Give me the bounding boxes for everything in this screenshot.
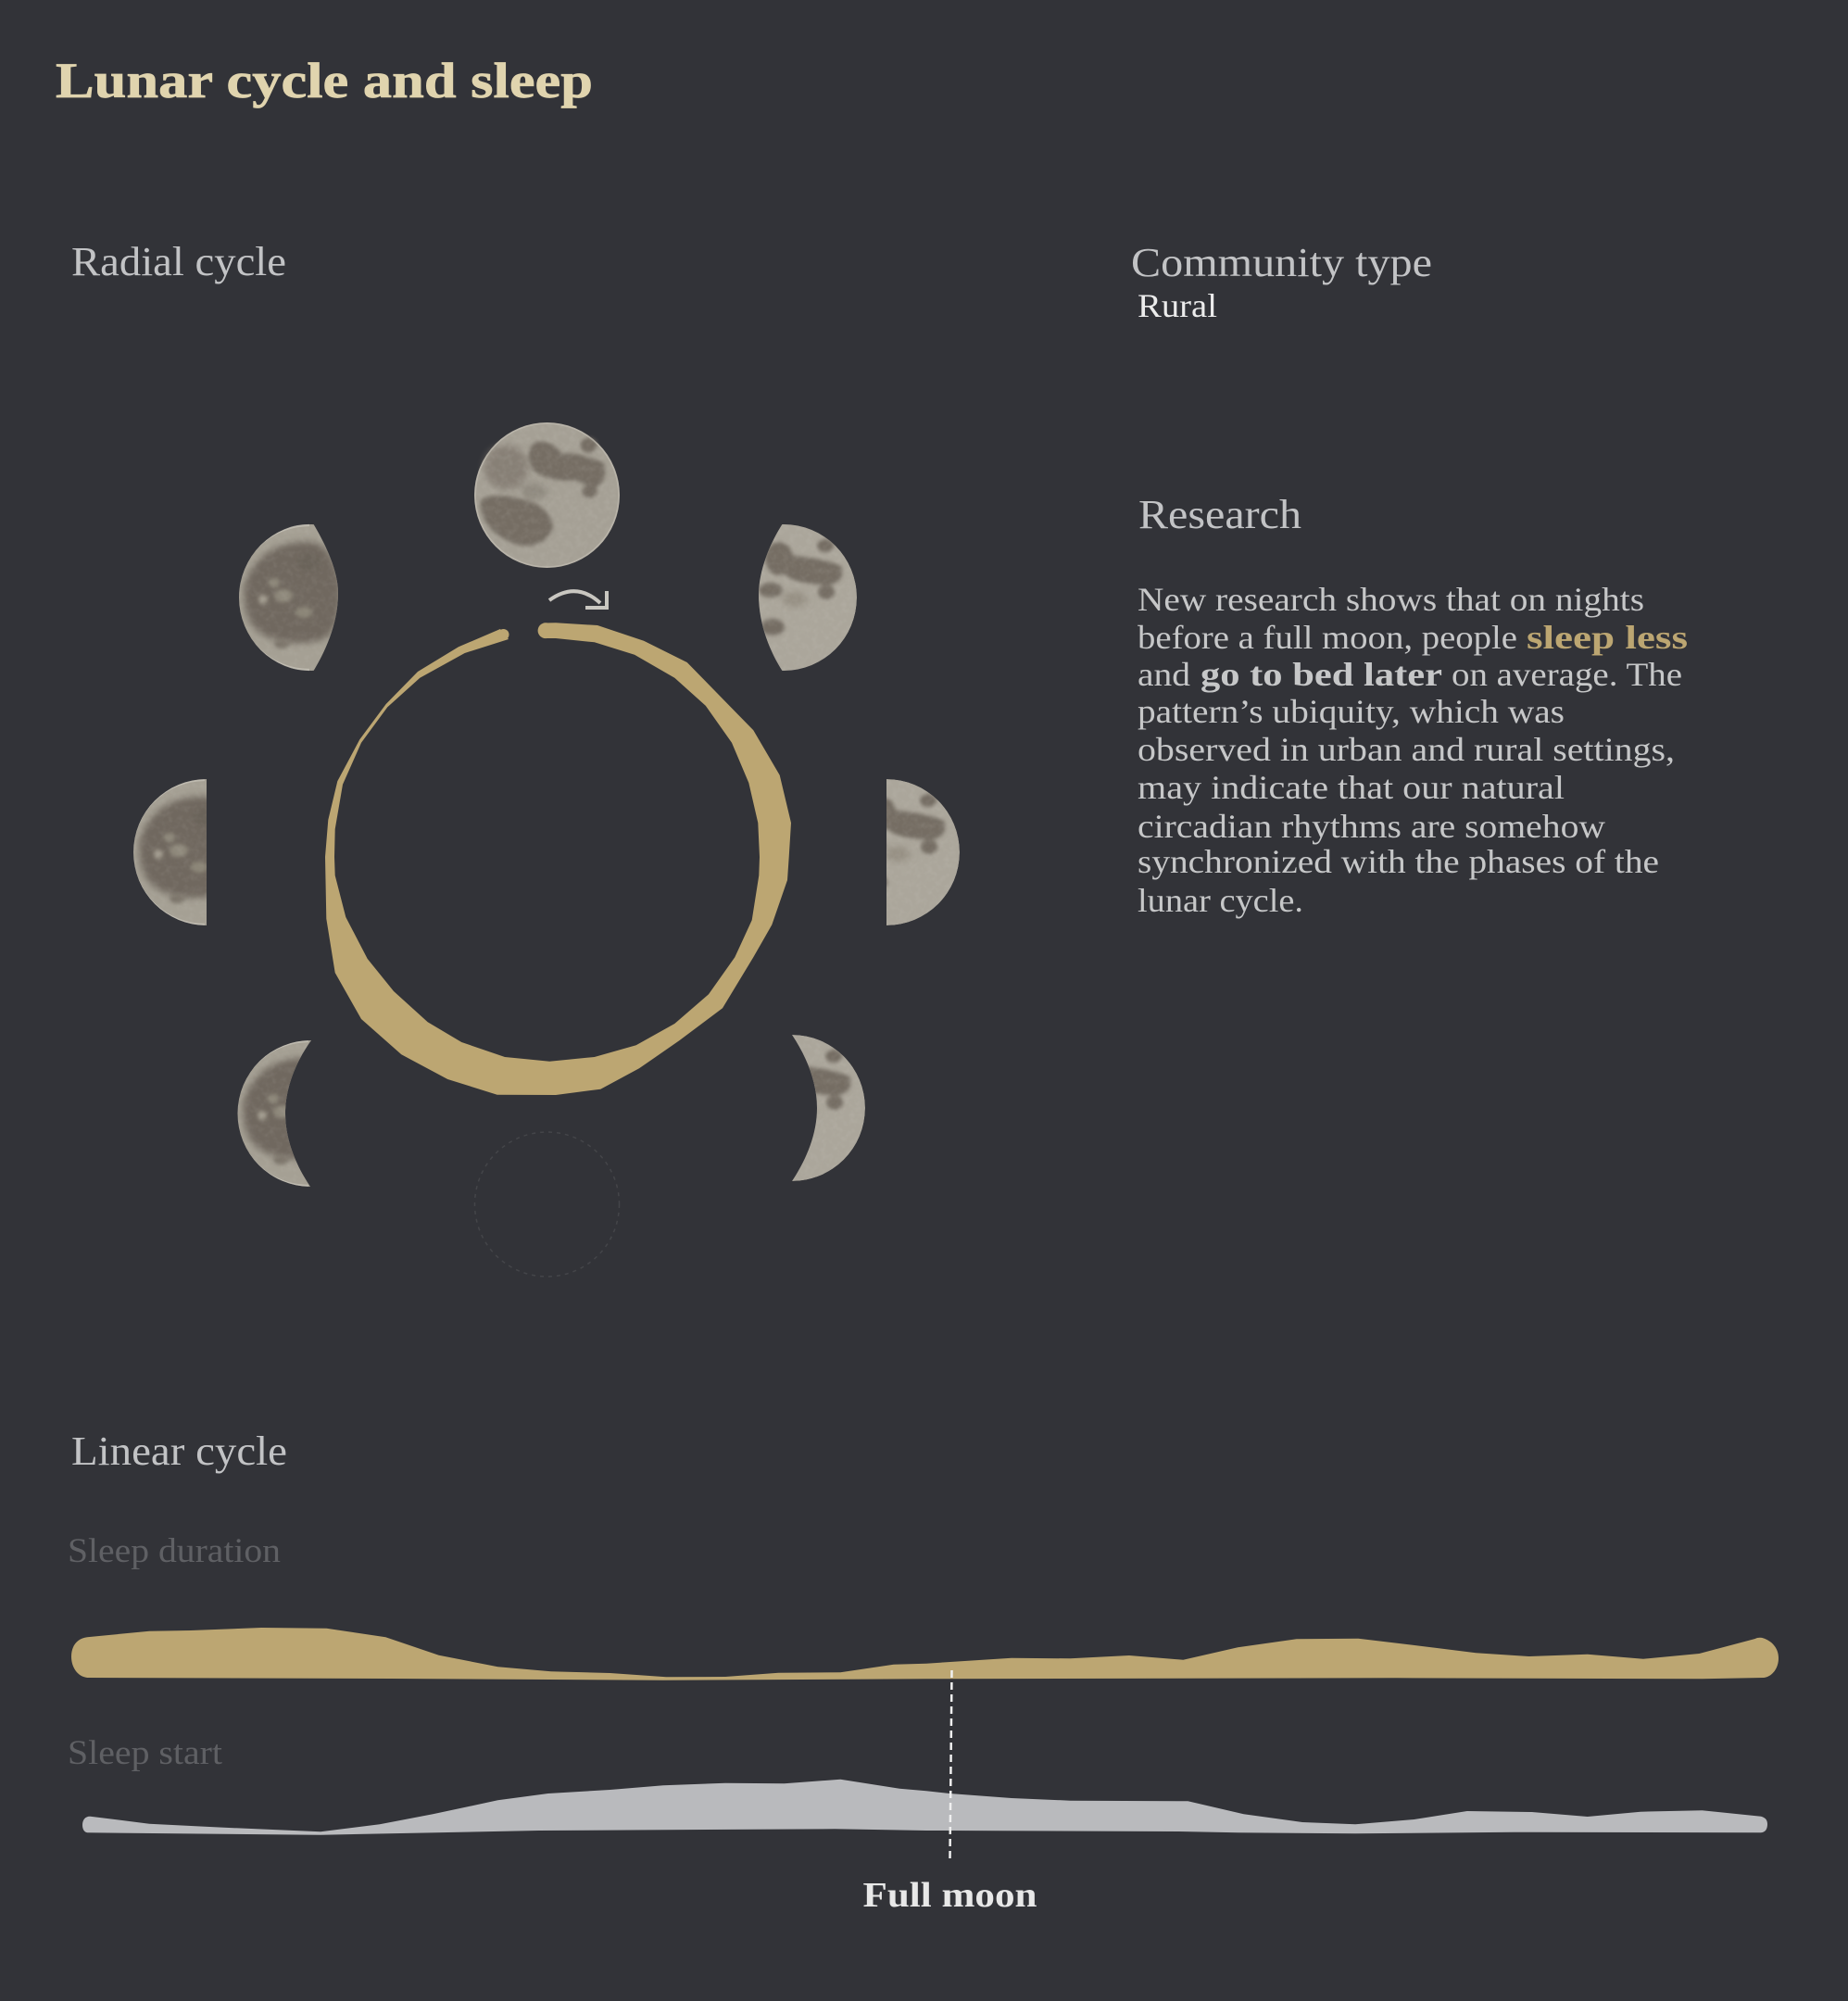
research paragraph: synchronized with the phases of the xyxy=(1138,843,1659,880)
selected community: rural: Rural xyxy=(1138,287,1217,324)
linear chart: sleep start xyxy=(82,1780,1767,1835)
moon: first quarter xyxy=(133,779,207,925)
research paragraph: observed in urban and rural settings, xyxy=(1138,731,1675,768)
radial chart: sleep duration ring xyxy=(325,623,791,1095)
research paragraph: sleep less xyxy=(1527,619,1688,656)
full moon marker line xyxy=(950,1670,952,1859)
label: sleep start: Sleep start xyxy=(68,1734,223,1772)
heading: radial cycle: Radial cycle xyxy=(71,239,286,284)
research paragraph: New research shows that on nights xyxy=(1138,581,1644,618)
title: Lunar cycle and sleep xyxy=(56,53,593,108)
heading: linear cycle: Linear cycle xyxy=(71,1428,287,1474)
label: sleep duration: Sleep duration xyxy=(68,1532,281,1570)
arrow: clockwise direction xyxy=(549,591,607,608)
research paragraph: go to bed later xyxy=(1201,656,1442,693)
research paragraph: on average. The xyxy=(1452,656,1682,693)
research paragraph xyxy=(1138,581,1688,919)
moon: full xyxy=(474,422,620,568)
research paragraph: and xyxy=(1138,656,1190,693)
moon: waning gibbous xyxy=(759,524,857,671)
panel: community type xyxy=(1131,240,1432,324)
moon: waning crescent xyxy=(792,1035,865,1181)
research paragraph: circadian rhythms are somehow xyxy=(1138,808,1605,845)
research paragraph: pattern’s ubiquity, which was xyxy=(1138,693,1565,730)
research paragraph: may indicate that our natural xyxy=(1138,769,1565,806)
panel: research xyxy=(1138,492,1688,919)
moon: waxing crescent xyxy=(237,1040,311,1187)
moon: new xyxy=(474,1132,619,1277)
linear chart: sleep duration xyxy=(71,1628,1779,1680)
heading: community type: Community type xyxy=(1131,240,1432,285)
panel: radial cycle moon phases xyxy=(132,422,960,1277)
research paragraph: lunar cycle. xyxy=(1138,882,1303,919)
moon: waxing gibbous xyxy=(239,524,338,671)
label: full moon: Full moon xyxy=(863,1876,1037,1915)
heading: research: Research xyxy=(1138,492,1301,537)
research paragraph: before a full moon, people xyxy=(1138,619,1517,656)
moon: last quarter xyxy=(886,779,960,925)
